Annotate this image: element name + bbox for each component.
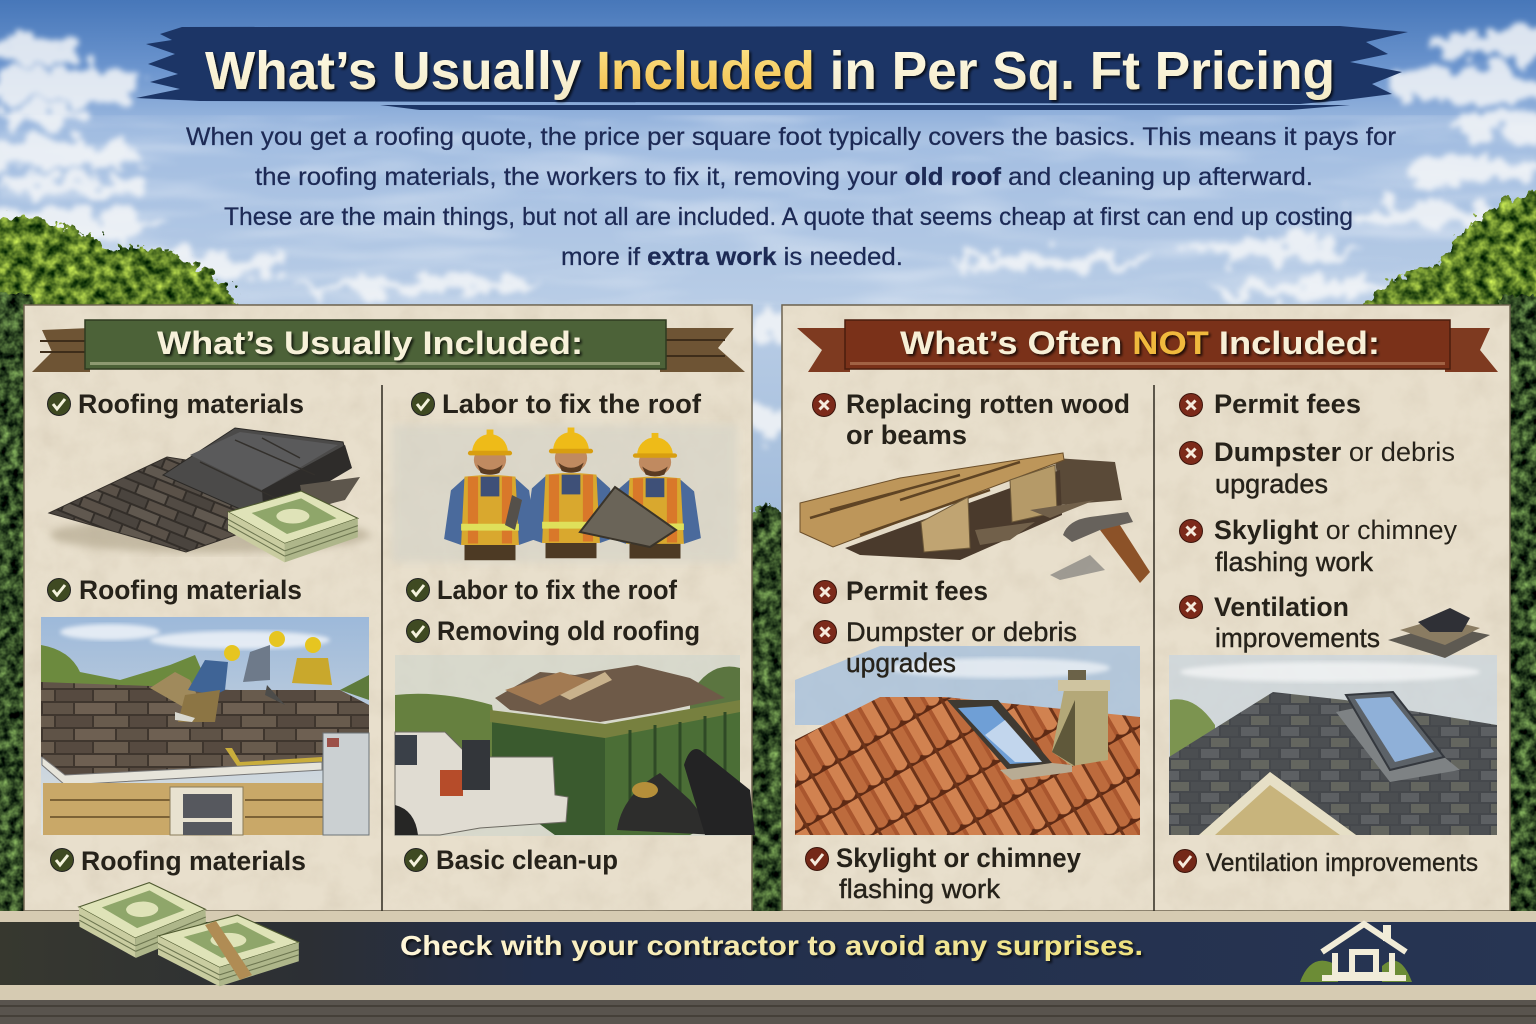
item: skylight or chimney 2 [1180,515,1457,577]
illustration: slate roof with skylight [1169,655,1497,835]
item: replacing rotten wood [812,389,1130,450]
panel: what's usually included [24,305,755,911]
item: dumpster upgrades 1 [814,617,1077,678]
ribbon heading: What’s Usually Included: [157,325,583,361]
roofers [150,631,332,722]
footer: cream strip, road and banner [0,911,1536,1024]
item: dumpster upgrades 2: Dumpster or debris [1214,437,1455,467]
item: skylight or chimney 2: flashing work [1215,547,1373,577]
illustration: rotten wood and hammer [800,453,1150,583]
item: removing old roofing: Removing old roofing [437,616,700,646]
intro paragraph [186,123,1396,271]
icon: stack of shingles [1388,608,1490,658]
item: ventilation improvements 1: improvements [1215,623,1380,653]
illustration: roofers on shingle roof [41,617,369,835]
item: skylight or chimney 1: Skylight or chimney [836,843,1081,873]
item: ventilation improvements 1: Ventilation [1214,592,1349,622]
intro paragraph: more if extra work is needed. [561,243,903,271]
ribbon heading: What’s Often NOT Included: [900,325,1380,361]
item: permit fees 1: Permit fees [846,576,988,606]
title banner [136,26,1408,110]
ribbon: not included [797,320,1498,372]
item: skylight or chimney 1 [806,843,1081,904]
item: ventilation improvements 1 [1180,592,1380,653]
item: roofing materials 1: Roofing materials [78,389,304,419]
item: replacing rotten wood: or beams [846,420,967,450]
title text: What’s Usually Included in Per Sq. Ft Pricing [205,41,1335,101]
item: roofing materials 2: Roofing materials [79,575,302,605]
item: labor 1: Labor to fix the roof [442,389,702,419]
item: skylight or chimney 2: Skylight or chimney [1214,515,1457,545]
intro paragraph: When you get a roofing quote, the price per square foot typically covers the basics. This means it pays for [186,123,1396,151]
background: tree top left [0,215,245,312]
intro paragraph: the roofing materials, the workers to fix it, removing your old roof and cleaning up afterward. [255,163,1313,191]
background: foliage between panels [745,505,790,915]
item: dumpster upgrades 1: Dumpster or debris [846,617,1077,647]
background: tree top right [1360,190,1536,312]
item: roofing materials 3: Roofing materials [81,846,306,876]
item: basic clean-up: Basic clean-up [436,845,618,875]
background: foliage right edge [1500,295,1536,920]
intro paragraph: These are the main things, but not all are included. A quote that seems cheap at first can end up costing [224,203,1353,231]
illustration: shingles and cash [49,428,370,562]
item: labor 2: Labor to fix the roof [437,575,678,605]
item: dumpster upgrades 2: upgrades [1215,469,1328,499]
icon: house [1300,924,1412,982]
panel: what's often not included [782,305,1510,911]
item: replacing rotten wood: Replacing rotten wood [846,389,1130,419]
illustration: three workers [392,425,737,562]
item: skylight or chimney 1: flashing work [839,874,1001,904]
item: dumpster upgrades 1: upgrades [846,648,956,678]
illustration: terracotta roof with skylight and chimney [795,646,1140,835]
illustration: dumpster and truck [395,655,755,836]
icon: money stacks [78,881,299,986]
ribbon: usually included [32,320,745,372]
footer text: Check with your contractor to avoid any surprises. [400,930,1143,961]
item: permit fees 2: Permit fees [1214,389,1361,419]
item: ventilation improvements 2: Ventilation improvements [1206,849,1478,877]
background: foliage left edge [0,295,34,920]
item: dumpster upgrades 2 [1180,437,1455,499]
